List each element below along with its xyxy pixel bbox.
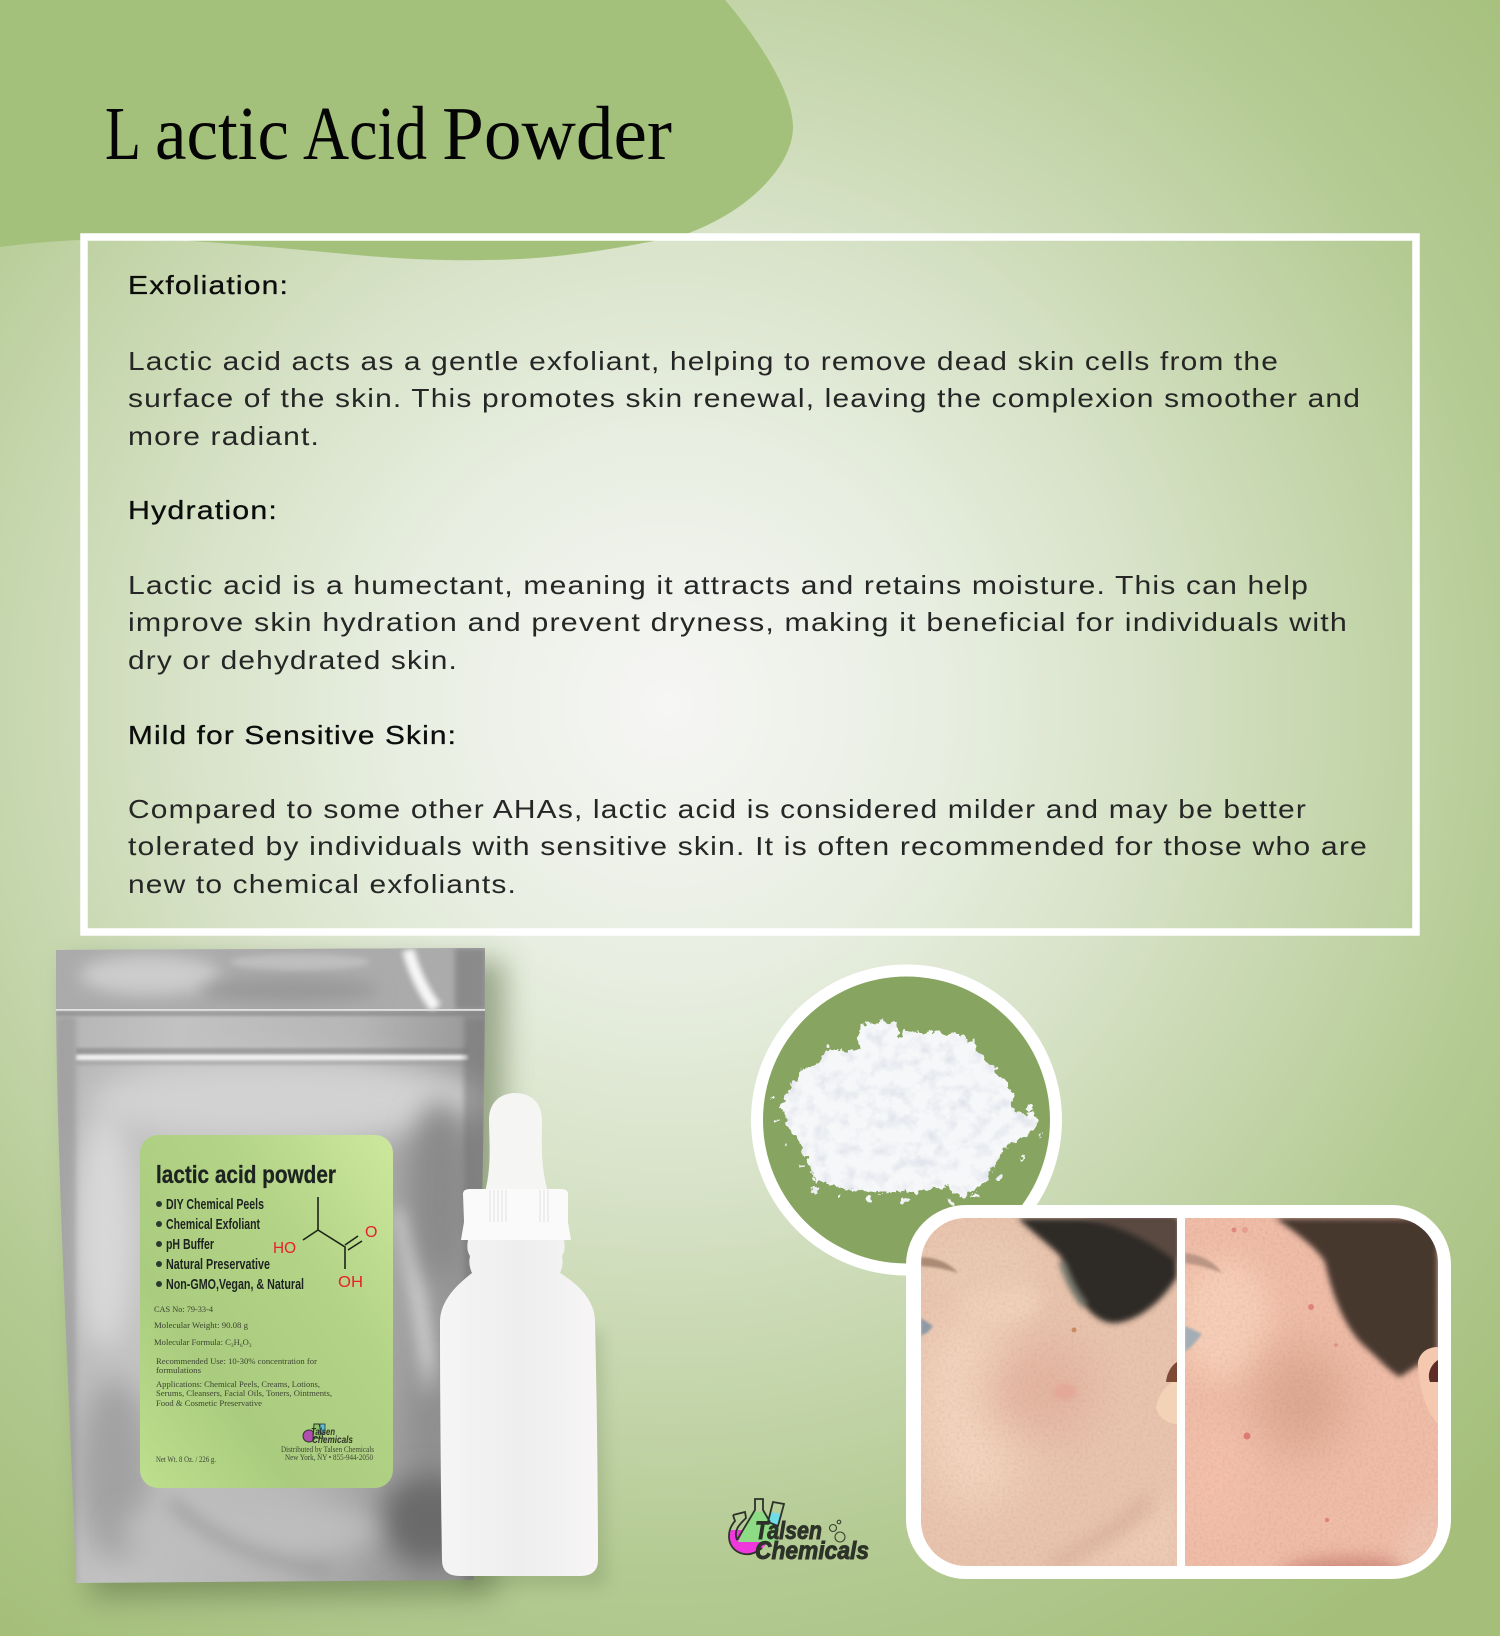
heading: exfoliation: Exfoliation:	[128, 270, 289, 300]
label details	[154, 1304, 375, 1464]
label title: lactic acid powder	[156, 1161, 336, 1189]
label details: Molecular Weight: 90.08 g	[154, 1320, 249, 1330]
text block: sensitive skin	[128, 794, 1368, 899]
text block: exfoliation	[128, 346, 1361, 451]
product: silver pouch with label	[56, 948, 490, 1583]
lactic acid molecule: HO	[273, 1240, 296, 1257]
bottle drop shadow	[452, 1330, 606, 1588]
label mini logo	[303, 1424, 353, 1446]
logo: Talsen Chemicals	[729, 1499, 869, 1565]
label details: Molecular Formula: C	[154, 1337, 231, 1347]
title	[105, 92, 672, 176]
hair	[1018, 1218, 1177, 1323]
label bullet list	[156, 1196, 304, 1293]
label details: 3	[249, 1343, 252, 1349]
text block: hydration: Lactic acid is a humectant, meaning it attracts and retains moisture. This can help	[128, 570, 1309, 600]
label details: Food & Cosmetic Preservative	[156, 1398, 262, 1408]
title: Powder	[442, 92, 672, 176]
label details: O	[243, 1337, 249, 1347]
label details: New York, NY • 855-944-2050	[285, 1452, 373, 1462]
label bullet list: DIY Chemical Peels	[166, 1196, 264, 1213]
label bullet list: Chemical Exfoliant	[166, 1216, 260, 1233]
bottle body	[440, 1240, 598, 1576]
text block: sensitive skin: new to chemical exfoliants.	[128, 869, 517, 899]
label details: 3	[231, 1343, 234, 1349]
text block: exfoliation: surface of the skin. This promotes skin renewal, leaving the complexion smoother and	[128, 383, 1361, 413]
label details: Serums, Cleansers, Facial Oils, Toners, Ointments,	[156, 1388, 332, 1398]
logo bubbles	[830, 1520, 845, 1542]
label bullet list: Natural Preservative	[166, 1256, 270, 1273]
label details: Net Wt. 8 Oz. / 226 g.	[156, 1454, 216, 1464]
lactic acid molecule	[273, 1197, 377, 1291]
product label	[140, 1135, 393, 1488]
label details: Applications: Chemical Peels, Creams, Lotions,	[156, 1379, 320, 1389]
label mini logo: Chemicals	[312, 1435, 353, 1446]
title: Acid	[303, 92, 427, 176]
logo: Talsen Chemicals: Talsen	[755, 1517, 822, 1545]
bottle bulb	[485, 1093, 548, 1192]
heading: mild for sensitive skin: Mild for Sensitive Skin:	[128, 720, 457, 750]
lactic acid molecule: O	[365, 1224, 377, 1241]
title blob shape	[0, 0, 793, 260]
label bullet list: pH Buffer	[166, 1236, 214, 1253]
label details: 6	[240, 1343, 243, 1349]
title: actic	[155, 92, 289, 176]
logo: Talsen Chemicals: Chemicals	[755, 1537, 869, 1565]
text block: hydration: improve skin hydration and prevent dryness, making it beneficial for individuals with	[128, 607, 1348, 637]
label details: CAS No: 79-33-4	[154, 1304, 214, 1314]
product: white dropper bottle	[440, 1093, 598, 1576]
title: L	[105, 92, 141, 176]
text block: sensitive skin: Compared to some other AHAs, lactic acid is considered milder and may be better	[128, 794, 1307, 824]
label details: formulations	[156, 1365, 202, 1375]
text block: sensitive skin: tolerated by individuals with sensitive skin. It is often recommended for those who are	[128, 831, 1368, 861]
photo frame: before and after skin	[906, 1205, 1451, 1593]
ear	[1156, 1380, 1177, 1424]
hair	[1275, 1218, 1438, 1377]
heading: hydration: Hydration:	[128, 495, 278, 525]
photo: lactic acid powder circle	[751, 964, 1062, 1276]
label mini logo: Talsen	[311, 1427, 335, 1438]
ear	[1418, 1347, 1438, 1424]
lactic acid molecule: OH	[338, 1274, 363, 1291]
text block: exfoliation: Lactic acid acts as a gentle exfoliant, helping to remove dead skin cells from the	[128, 346, 1279, 376]
label bullet list: Non-GMO,Vegan, & Natural	[166, 1276, 304, 1293]
text block: hydration	[128, 570, 1348, 675]
label details: Recommended Use: 10-30% concentration for	[156, 1356, 317, 1366]
label details: Distributed by Talsen Chemicals	[281, 1444, 375, 1454]
photo: face before	[920, 1218, 1177, 1566]
text block: hydration: dry or dehydrated skin.	[128, 645, 458, 675]
bag drop shadow	[70, 960, 505, 1598]
powder pile	[770, 1022, 1042, 1205]
photo: face after	[1180, 1218, 1438, 1593]
logo flasks	[729, 1499, 784, 1554]
bottle cap	[461, 1189, 571, 1240]
label details: H	[234, 1337, 240, 1347]
panel: benefits frame	[84, 237, 1416, 932]
text block: exfoliation: more radiant.	[128, 421, 320, 451]
